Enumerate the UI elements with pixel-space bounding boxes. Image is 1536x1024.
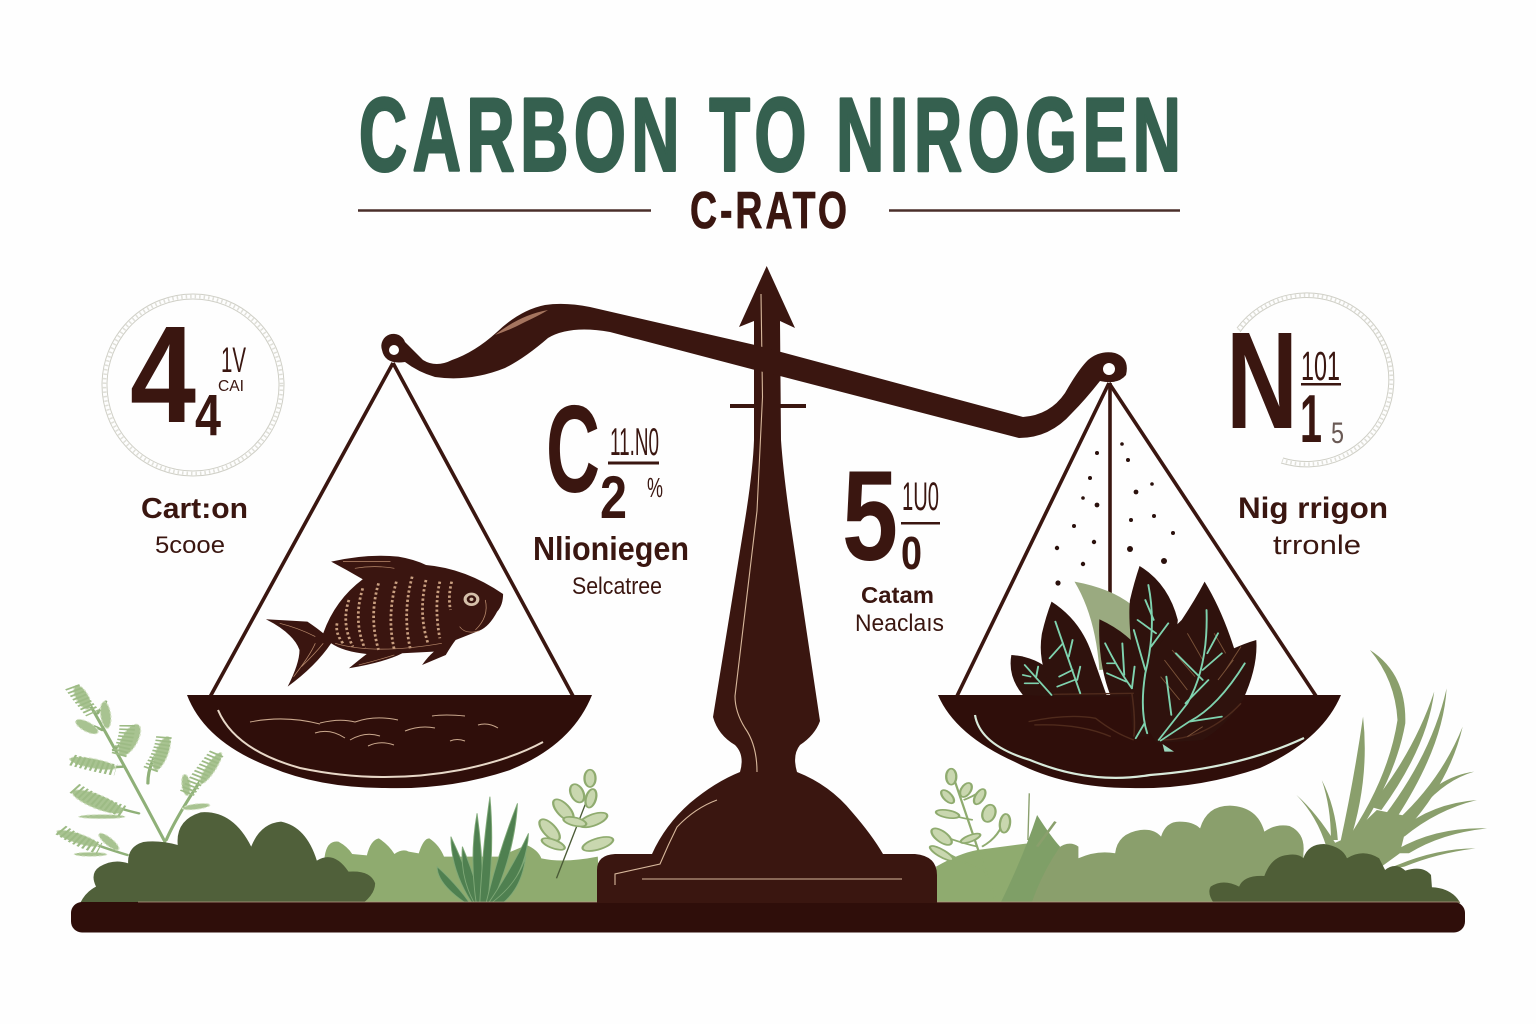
label: catam: Neaclaıs bbox=[855, 610, 944, 637]
label: nitrogen right: trronle bbox=[1273, 530, 1361, 560]
label: nitrogen right bbox=[1238, 492, 1388, 560]
stat: N: 101 bbox=[1301, 343, 1340, 389]
stat: N: 5 bbox=[1331, 417, 1344, 450]
scale beam bbox=[381, 304, 1127, 438]
right pan bbox=[938, 695, 1341, 788]
label: nitrogen left bbox=[533, 530, 689, 600]
title: CARBON TO NIROGEN bbox=[359, 76, 1181, 193]
bush: right dark bbox=[1209, 844, 1460, 903]
leaves icon bbox=[1011, 566, 1256, 752]
carbon badge: ring bbox=[102, 294, 284, 476]
label: catam bbox=[855, 582, 944, 637]
falling dots bbox=[1055, 442, 1175, 586]
stat: left carbon 4: 4 bbox=[195, 383, 221, 448]
stat: N: 1 bbox=[1300, 381, 1322, 457]
plant: left grass tuft bbox=[437, 797, 528, 902]
stat: left carbon 4 bbox=[130, 298, 246, 452]
stat: C2: 2 bbox=[600, 464, 627, 531]
base bar bbox=[71, 902, 1465, 932]
stat: 5/0: 0 bbox=[901, 527, 922, 579]
left pan bbox=[187, 695, 592, 788]
plant: right sprig with grass bbox=[927, 769, 1060, 903]
stat: C2: 11.N0 bbox=[610, 421, 659, 464]
bush: right light bbox=[1032, 806, 1304, 903]
label: nitrogen right: Nig rrigon bbox=[1238, 492, 1388, 525]
stat: C2: % bbox=[647, 472, 663, 503]
plants: right background meadow bbox=[936, 843, 1037, 903]
label: carbon: Cart:on bbox=[141, 493, 248, 525]
beam hole left bbox=[389, 345, 399, 355]
stat: left carbon 4: 1V bbox=[221, 341, 246, 380]
label: catam: Catam bbox=[861, 582, 934, 608]
nitrogen badge: ring bbox=[1237, 293, 1394, 467]
label: carbon bbox=[141, 493, 248, 559]
stat: 5/0: 5 bbox=[842, 445, 898, 588]
plants: left background meadow bbox=[321, 838, 600, 902]
label: nitrogen left: Nlioniegen bbox=[533, 530, 689, 567]
beam highlight bbox=[495, 310, 548, 335]
subtitle with rules: C-RATO bbox=[690, 181, 847, 239]
stat: left carbon 4: 4 bbox=[130, 298, 196, 452]
label: carbon: 5cooe bbox=[155, 532, 225, 559]
stat: 5/0: 1U0 bbox=[902, 475, 939, 519]
beam hole right bbox=[1103, 363, 1115, 375]
left pan strings bbox=[210, 363, 573, 696]
stat: N: N bbox=[1226, 304, 1298, 458]
plant: left sprig bbox=[535, 770, 616, 878]
scale post with arrow and crossbar bbox=[597, 266, 937, 903]
right pan strings bbox=[957, 383, 1316, 696]
bush: left dark bbox=[80, 812, 375, 903]
plant: left tall fern bbox=[54, 684, 225, 856]
plant: right grass tall bbox=[1296, 650, 1487, 870]
stat: C2: C bbox=[546, 381, 600, 519]
label: nitrogen left: Selcatree bbox=[572, 573, 662, 600]
stat: left carbon 4: CAI bbox=[218, 378, 244, 395]
fish icon bbox=[266, 556, 503, 687]
